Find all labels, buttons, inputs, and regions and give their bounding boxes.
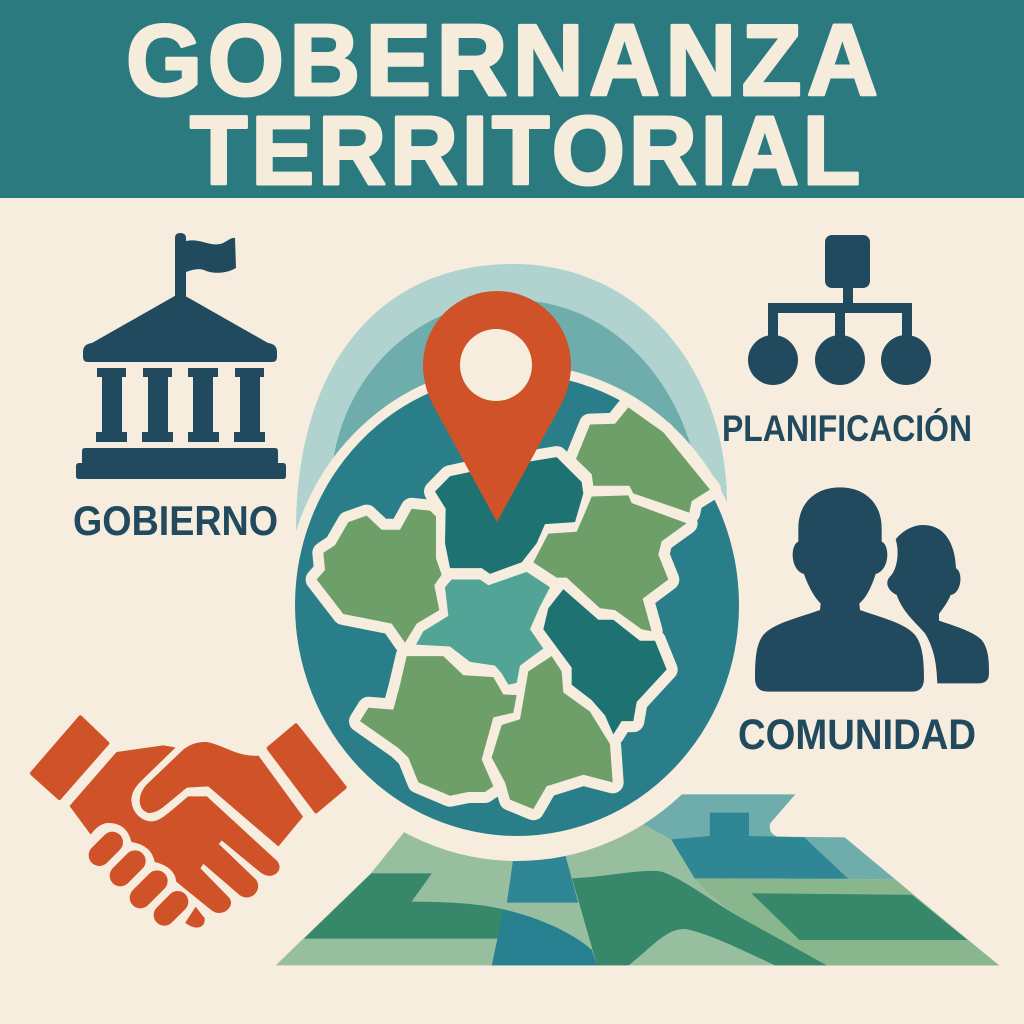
title banner	[0, 0, 1024, 205]
blue field	[671, 813, 848, 879]
region: west	[317, 509, 442, 643]
roof	[83, 293, 277, 362]
left cuff	[32, 717, 107, 798]
icon: organization chart	[748, 235, 931, 385]
region: center	[416, 572, 550, 685]
little finger tip	[186, 907, 204, 927]
region: southwest	[360, 656, 517, 796]
base	[76, 448, 286, 479]
right cuff	[269, 725, 345, 811]
region: north	[435, 457, 583, 574]
ocean	[295, 374, 739, 836]
right hand	[140, 742, 303, 846]
icon: community people	[755, 487, 989, 692]
halo arcs behind globe	[296, 264, 727, 605]
title line 1: GOBERNANZA	[126, 5, 878, 117]
dark green central field	[572, 871, 827, 965]
region: southeast	[543, 589, 667, 735]
river upper	[507, 853, 578, 903]
icon: handshake	[32, 717, 345, 927]
region: south	[492, 656, 613, 809]
light green land	[276, 820, 999, 965]
region borders	[317, 407, 710, 809]
region: east	[533, 495, 687, 631]
light teal land	[636, 794, 895, 879]
river lower	[492, 909, 597, 965]
fingers	[99, 842, 178, 915]
icon: location pin	[423, 291, 571, 522]
left hand	[70, 746, 279, 913]
person front	[755, 487, 924, 692]
icon: government building	[76, 233, 286, 479]
sage band	[695, 879, 999, 965]
map terrain	[276, 794, 999, 965]
label: gobierno: GOBIERNO	[73, 497, 278, 544]
columns	[96, 368, 127, 442]
globe clearance ring	[404, 794, 682, 861]
person back	[887, 525, 989, 683]
label: comunidad: COMUNIDAD	[738, 711, 976, 759]
label: planificacion: PLANIFICACIÓN	[722, 407, 972, 449]
globe	[295, 374, 739, 836]
regions	[317, 407, 710, 809]
title line 2: TERRITORIAL	[190, 98, 860, 205]
region: northeast	[576, 407, 710, 513]
flag	[175, 233, 236, 296]
dark green left field	[304, 873, 504, 939]
dark green right field	[751, 893, 967, 940]
